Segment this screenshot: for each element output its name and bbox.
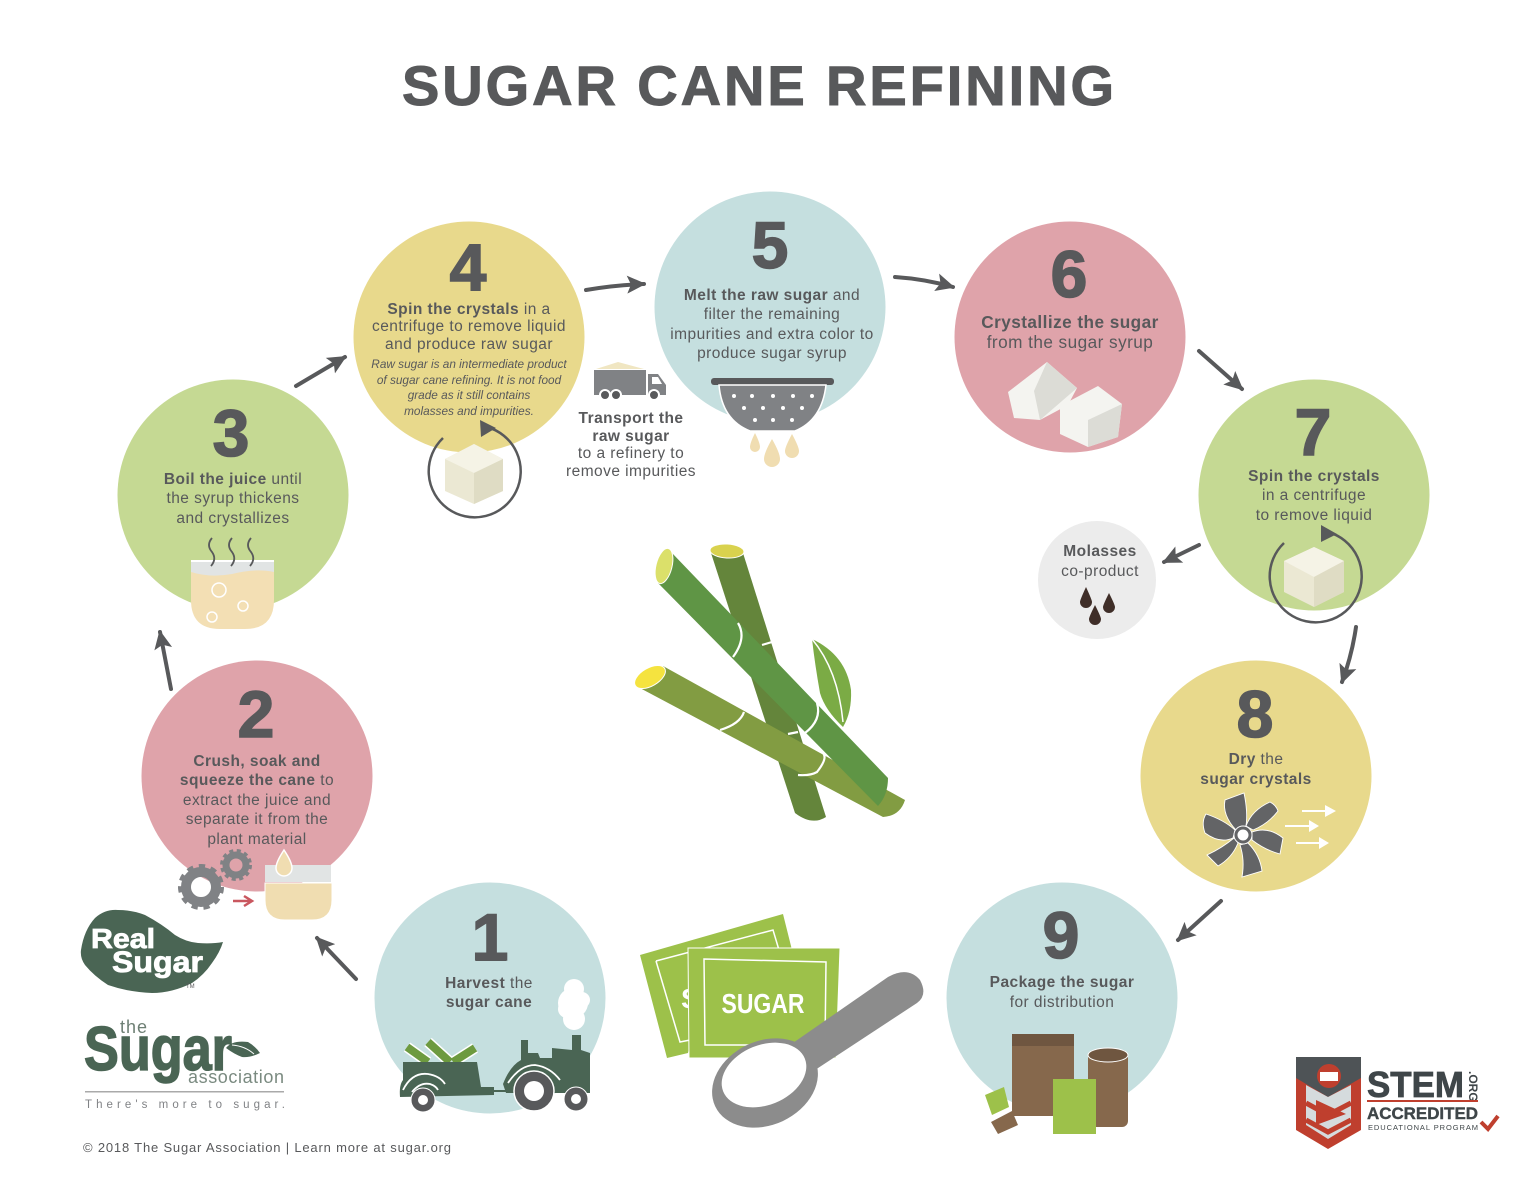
logo: The Sugar Association — [84, 1015, 285, 1111]
icon: molasses drops — [1080, 587, 1115, 625]
step 7: spin: 7 — [1295, 395, 1331, 469]
transport note: Transport the — [579, 410, 683, 427]
logo: Real Sugar — [81, 910, 223, 993]
step 4: spin: and produce raw sugar — [385, 336, 553, 353]
arrow: 1 to 2 — [317, 938, 356, 979]
step 5: melt: produce sugar syrup — [697, 345, 847, 362]
icon: tractor and trailer — [400, 1035, 590, 1112]
arrow: 4 to 5 — [586, 284, 644, 290]
badge: STEM.org accredited: EDUCATIONAL PROGRAM — [1368, 1123, 1478, 1132]
logo: Real Sugar: Real — [91, 923, 155, 954]
step 8: dry: 8 — [1237, 677, 1273, 751]
step 4: spin: centrifuge to remove liquid — [372, 318, 566, 335]
step 9: package: 9 — [1043, 898, 1079, 972]
step 2: crush: 2 — [238, 677, 274, 751]
step 5: melt: impurities and extra color to — [670, 326, 874, 343]
step 7: spin — [1198, 380, 1430, 622]
step 8: dry: Dry the — [1229, 751, 1283, 768]
transport note: raw sugar — [592, 428, 670, 445]
sugar packet back: S — [681, 983, 700, 1014]
step 5: melt: filter the remaining — [704, 306, 840, 323]
icon: boiling pot — [191, 538, 274, 629]
badge: STEM.org accredited: ACCREDITED — [1367, 1104, 1478, 1123]
step 3: boil — [118, 380, 348, 629]
logo: The Sugar Association: the — [120, 1017, 147, 1037]
step 2: crush: separate it from the — [186, 811, 328, 828]
icon: juice bowl — [265, 850, 332, 920]
badge: STEM.org accredited: .ORG — [1466, 1071, 1480, 1102]
step 9: package: for distribution — [1010, 994, 1114, 1011]
badge: STEM.org accredited — [1296, 1057, 1498, 1149]
step 9: package — [946, 882, 1178, 1134]
icon: smoke — [558, 979, 590, 1030]
step 6: crystallize: from the sugar syrup — [987, 332, 1153, 352]
step 4: spin: Spin the crystals in a — [387, 301, 551, 318]
title: SUGAR CANE REFINING — [402, 54, 1114, 117]
icon: colander and drops — [711, 378, 834, 467]
step 5: melt: 5 — [752, 208, 788, 282]
arrow: 3 to 4 — [296, 357, 345, 386]
icon: rotating sugar cube — [429, 420, 521, 517]
icon: fan — [1203, 793, 1283, 877]
arrow: 8 to 9 — [1178, 901, 1221, 940]
step 7: spin: in a centrifuge — [1262, 487, 1366, 504]
illustration: sugar packets and spoon — [640, 914, 923, 1144]
step 1: harvest: Harvest the — [445, 975, 533, 992]
badge shield — [1296, 1057, 1361, 1149]
step 4: spin: molasses and impurities. — [404, 404, 534, 418]
molasses co-product: Molasses — [1063, 543, 1137, 560]
icon: air arrows — [1285, 805, 1336, 849]
logo: The Sugar Association: There's more to sugar. — [85, 1099, 285, 1111]
step 6: crystallize: 6 — [1051, 237, 1087, 311]
step 2: crush — [142, 660, 372, 920]
sugar packet front — [688, 948, 840, 1058]
step 5: melt: Melt the raw sugar and — [684, 287, 860, 304]
arrows between steps — [160, 277, 1356, 979]
logo: Real Sugar: Sugar — [112, 946, 203, 979]
transport note — [566, 362, 696, 480]
arrow: 7 to 8 — [1342, 627, 1356, 682]
step 4: spin: Raw sugar is an intermediate product — [371, 357, 567, 371]
icon: red arrow — [233, 896, 252, 906]
icon: sugar packages — [985, 1034, 1128, 1134]
step 1: harvest: 1 — [472, 900, 508, 974]
sugar packet back — [640, 914, 792, 1058]
step 2: crush: plant material — [207, 831, 307, 848]
step 4: spin — [354, 222, 584, 517]
step 4: spin: grade as it still contains — [408, 388, 530, 402]
step 6: crystallize — [954, 222, 1186, 452]
molasses co-product: co-product — [1061, 563, 1139, 580]
badge: STEM.org accredited: STEM — [1367, 1064, 1464, 1105]
icon: truck — [594, 362, 666, 400]
icon: rotating sugar cube — [1270, 525, 1362, 622]
footer credit: © 2018 The Sugar Association | Learn more at sugar.org — [83, 1140, 451, 1155]
arrow: 5 to 6 — [895, 277, 953, 287]
arrow: 7 to molasses — [1164, 545, 1199, 562]
arrow: 6 to 7 — [1199, 351, 1242, 389]
step 3: boil: the syrup thickens — [166, 490, 300, 507]
step 1: harvest — [374, 882, 606, 1114]
step 3: boil: and crystallizes — [176, 510, 290, 527]
step 3: boil: 3 — [213, 396, 249, 470]
step 1: harvest: sugar cane — [446, 994, 532, 1011]
step 9: package: Package the sugar — [990, 974, 1134, 991]
step 8: dry — [1140, 660, 1372, 892]
step 2: crush: Crush, soak and — [193, 753, 321, 770]
step 7: spin: Spin the crystals — [1248, 468, 1380, 485]
step 2: crush: squeeze the cane to — [180, 772, 334, 789]
logo: The Sugar Association: Sugar — [84, 1015, 232, 1084]
step 4: spin: 4 — [450, 230, 487, 304]
step 7: spin: to remove liquid — [1256, 507, 1372, 524]
step 6: crystallize: Crystallize the sugar — [981, 312, 1159, 332]
step 3: boil: Boil the juice until — [164, 471, 302, 488]
logo: Real Sugar: TM — [186, 984, 195, 990]
transport note: remove impurities — [566, 463, 696, 480]
step 8: dry: sugar crystals — [1200, 771, 1312, 788]
icon: gears — [181, 851, 250, 907]
sugar packet front: SUGAR — [722, 988, 804, 1019]
icon: sugar cubes — [1008, 362, 1122, 447]
transport note: to a refinery to — [578, 445, 684, 462]
logo: The Sugar Association: association — [188, 1067, 284, 1087]
molasses co-product — [1038, 521, 1156, 639]
arrow: 2 to 3 — [160, 632, 171, 689]
spoon — [697, 972, 923, 1144]
illustration: sugar cane stalks — [631, 543, 905, 821]
step 5: melt — [654, 192, 886, 467]
icon: red check — [1481, 1116, 1498, 1129]
step 2: crush: extract the juice and — [183, 792, 331, 809]
step 4: spin: of sugar cane refining. It is not food — [377, 373, 562, 387]
